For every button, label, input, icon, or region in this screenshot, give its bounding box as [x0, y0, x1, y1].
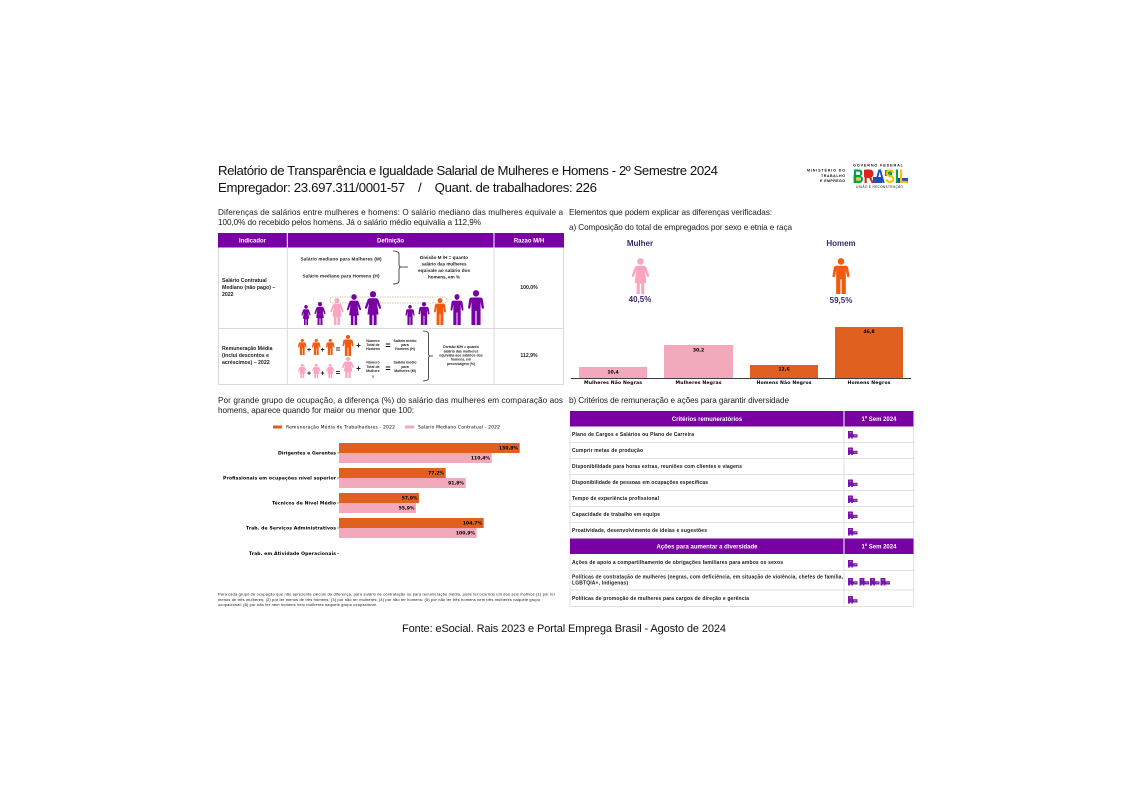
title: Empregador: 23.697.311/0001-57 / Quant. de trabalhadores: 226: [218, 180, 597, 195]
definição mediana: fórmula: homens, em %: [428, 274, 460, 280]
text: por grande grupo de ocupação: Por grande grupo de ocupação, a diferença (%) do salário das mulheres em comparação aos: [218, 396, 563, 405]
panel: mulher: [627, 239, 653, 304]
bar: homens negros: [835, 327, 903, 386]
definição média: mulheres: Mulheres (M): [394, 369, 416, 373]
footnote: ocupacional; (6) por não ter nem homens nem mulheres naquele grupo ocupacional.: [218, 602, 377, 607]
header: ações: [570, 538, 914, 554]
panel: homem: Homem: [826, 239, 856, 248]
bars: profissionais: [223, 468, 466, 488]
definição média: homens: Salário médio: [394, 339, 416, 343]
bars: técnicos: 57,9%: [402, 496, 418, 502]
bars: dirigentes e gerentes: Dirigentes e Gerentes: [278, 451, 336, 457]
panel: mulher: Mulher: [627, 239, 653, 248]
definição média: homens: +: [320, 347, 325, 354]
definição mediana: fórmula: salário das mulheres: [422, 262, 467, 266]
definição média: homens: [298, 335, 416, 356]
text: por grande grupo de ocupação: [218, 396, 563, 415]
bars: profissionais: Profissionais em ocupações nível superior: [223, 475, 337, 482]
bar: mulheres negras: [664, 345, 733, 386]
footnote: menos de três mulheres; (2) por ter menos de três homens; (3) por não ter mulheres; (4) por não ter homens; (5) por não ter três homens nem três mulheres naquele grupo: [218, 597, 540, 602]
footnote: Para cada grupo de ocupação que não apresenta cálculo da diferença, para salário de contratação ou para remuneração média, pode ter ocorrido um dos seis motivos (1) por ter: [218, 592, 556, 596]
bars: dirigentes e gerentes: 130,8%: [499, 446, 518, 452]
text: diferenças de salários: Diferenças de salários entre mulheres e homens: O salário mediano das mulheres equivale a: [218, 208, 563, 217]
definição média: homens: Homens: [366, 347, 380, 351]
table header: Indicador: [239, 238, 267, 244]
bar chart: diferença por ocupação: [223, 424, 520, 557]
definição média: mulheres: Número: [366, 360, 380, 364]
row: equipe: Capacidade de trabalho em equipe: [572, 512, 660, 518]
definição média: homens: +: [307, 347, 311, 354]
bar: mulheres negras: Mulheres Negras: [676, 380, 722, 386]
row: ocupações específicas: Disponibilidade de pessoas em ocupações específicas: [572, 480, 708, 486]
bars: profissionais: 91,8%: [448, 481, 464, 487]
label: atividade operacionais: Trab. em Atividade Operacionais: [249, 551, 336, 557]
definição média: mulheres: Salário médio: [394, 360, 416, 364]
chave e divisão M/H: salário das mulheres: [444, 349, 478, 353]
bar: homens não negros: [750, 365, 818, 386]
value: razão média: 112,9%: [520, 353, 538, 359]
row label: remuneração média: (inclui descontos e: [222, 353, 269, 359]
panel: homem: [826, 239, 856, 305]
row label: salário contratual: Mediano (não pago) –: [222, 285, 275, 291]
row: plano de cargos: Plano de Cargos e Salários ou Plano de Carreira: [572, 432, 694, 438]
definição média: homens: Total de: [366, 343, 380, 347]
text: diferenças de salários: [218, 208, 563, 227]
definição mediana: fórmula: Divisão M /H = quanto: [420, 255, 468, 260]
icon: homem: [832, 258, 850, 294]
logo: ministério e governo federal: UNIÃO E RECONSTRUÇÃO: [856, 184, 904, 189]
text: elementos: [569, 208, 792, 232]
row: experiência: Tempo de experiência profissional: [572, 496, 660, 502]
definição média: mulheres: +: [320, 370, 325, 378]
chave e divisão M/H: homens, em: [451, 358, 471, 362]
row: metas: [572, 448, 858, 455]
row label: remuneração média: Remuneração Média: [222, 346, 273, 352]
bar: homens não negros: 12,6: [778, 366, 790, 372]
panel: homem: 59,5%: [830, 296, 852, 305]
header: critérios remuneratórios: Critérios remuneratórios: [672, 417, 743, 423]
row: horas extras: Disponibilidade para horas extras, reuniões com clientes e viagens: [572, 464, 742, 470]
header: ações: 1º Sem 2024: [862, 544, 897, 550]
value: razão mediana: 100,0%: [520, 285, 538, 291]
logo: ministério e governo federal: MINISTÉRIO DO: [807, 168, 845, 172]
title: [218, 163, 718, 195]
legend: Remuneração Média de Trabalhadores - 2022: [286, 424, 395, 431]
row label: salário contratual: 2022: [222, 292, 234, 298]
icon: mulher: [632, 258, 649, 294]
definição média: homens: Número: [366, 339, 380, 343]
row: promoção: [572, 596, 858, 604]
bar: homens negros: Homens Negros: [848, 380, 891, 386]
definição média: mulheres: s: [372, 374, 374, 378]
definição média: mulheres: Total de: [366, 365, 380, 369]
bar: homens não negros: Homens Não Negros: [756, 380, 812, 386]
row label: remuneração média: [222, 346, 273, 366]
text: por grande grupo de ocupação: homens, aparece quando for maior ou menor que 100:: [218, 406, 414, 415]
panel: tabela de critérios: [570, 411, 914, 606]
legend: Salário Mediano Contratual - 2022: [418, 424, 500, 431]
bars: serviços administrativos: 104,7%: [463, 521, 482, 527]
definição média: mulheres: =: [336, 368, 341, 378]
bar: mulheres não negras: [579, 367, 647, 386]
row: experiência: [572, 496, 858, 503]
row: proatividade: [572, 528, 858, 536]
legend: [273, 424, 500, 431]
row: apoio familiar: [572, 560, 858, 568]
definição média: mulheres: [298, 357, 416, 378]
definição média: mulheres: Mulhere: [366, 369, 380, 373]
bars: técnicos: Técnicos de Nível Médio: [272, 500, 336, 507]
chave e divisão M/H: [423, 331, 483, 381]
definição média: mulheres: +: [356, 364, 361, 373]
definição média: mulheres: para: [401, 365, 409, 369]
bars: serviços administrativos: 100,9%: [456, 531, 475, 537]
header: critérios remuneratórios: 1º Sem 2024: [862, 417, 897, 423]
logo: ministério e governo federal: [807, 164, 908, 189]
source: Fonte: eSocial. Rais 2023 e Portal Emprega Brasil - Agosto de 2024: [402, 623, 726, 635]
panel: mulher: 40,5%: [629, 295, 651, 304]
table header: Definição: [377, 238, 404, 244]
bars: profissionais: 77,2%: [428, 471, 444, 477]
row label: remuneração média: acréscimos) – 2022: [222, 360, 270, 366]
logo: ministério e governo federal: GOVERNO FEDERAL: [853, 164, 904, 168]
logo: ministério e governo federal: TRABALHO: [821, 174, 845, 178]
row: plano de cargos: [572, 431, 858, 439]
row: contratação: [572, 574, 890, 586]
chave e divisão M/H: percentagem (%): [447, 362, 475, 366]
bars: serviços administrativos: [246, 518, 484, 538]
definição média: homens: para: [401, 343, 409, 347]
logo: ministério e governo federal: E EMPREGO: [820, 179, 845, 183]
text: critérios heading: b) Critérios de remuneração e ações para garantir diversidade: [569, 396, 789, 405]
text: diferenças de salários: 100,0% do recebido pelos homens. Já o salário médio equivalia a 112,9%: [218, 218, 481, 227]
row: contratação: Políticas de contratação de mulheres (negras, com deficiência, em situação de violência, chefes de família,: [572, 574, 844, 580]
definição média: homens: Homens (H): [395, 347, 415, 351]
bars: serviços administrativos: Trab. de Serviços Administrativos: [246, 526, 336, 532]
header: ações: Ações para aumentar a diversidade: [656, 544, 758, 550]
bar chart: composição: [571, 327, 911, 386]
bars: dirigentes e gerentes: 110,4%: [471, 456, 490, 462]
definição média: homens: =: [336, 345, 341, 354]
definição média: mulheres: +: [307, 370, 311, 378]
row: promoção: Políticas de promoção de mulheres para cargos de direção e gerência: [572, 596, 749, 602]
row label: salário contratual: [222, 278, 275, 298]
row label: salário contratual: Salário Contratual: [222, 278, 267, 284]
row: contratação: LGBTQIA+, Indígenas): [572, 580, 628, 586]
definição mediana: fórmula: [300, 251, 470, 284]
text: elementos: a) Composição do total de empregados por sexo e etnia e raça: [569, 223, 792, 232]
definição média: homens: +: [356, 341, 361, 350]
bar: mulheres não negras: Mulheres Não Negras: [584, 380, 642, 386]
header: critérios remuneratórios: [570, 411, 914, 426]
pictograma: mulheres e homens ordenados: [301, 290, 484, 325]
panel: tabela de indicadores: [218, 233, 564, 384]
row: ocupações específicas: [572, 480, 858, 487]
title: Relatório de Transparência e Igualdade Salarial de Mulheres e Homens - 2º Semestre 2024: [218, 163, 718, 178]
definição média: homens: =: [385, 340, 391, 350]
table header: Razao M/H: [514, 238, 544, 244]
table header: [218, 233, 564, 248]
bar: mulheres negras: 30,2: [693, 348, 704, 354]
row: equipe: [572, 512, 858, 519]
row: metas: Cumprir metas de produção: [572, 448, 643, 454]
definição média: mulheres: =: [385, 364, 391, 374]
bar: mulheres não negras: 10,4: [607, 370, 619, 376]
definição mediana: fórmula: equivale ao salário dos: [418, 268, 470, 273]
bars: dirigentes e gerentes: [278, 443, 520, 463]
bar: homens negros: 46,8: [863, 329, 875, 335]
row: proatividade: Proatividade, desenvolvimento de ideias e sugestões: [572, 528, 707, 534]
chave e divisão M/H: Divisão M/H = quanto: [443, 345, 479, 349]
definição mediana: fórmula: Salário mediano para Homens (H): [302, 274, 380, 278]
footnote: [218, 592, 556, 607]
bars: técnicos: 55,9%: [399, 506, 415, 512]
text: elementos: Elementos que podem explicar as diferenças verificadas:: [569, 208, 772, 217]
logo: ministério e governo federal: BRASIL: [853, 167, 908, 188]
definição mediana: fórmula: Salário mediano para Mulheres (M): [300, 256, 382, 262]
bars: técnicos: [272, 493, 419, 513]
row: apoio familiar: Ações de apoio a compartilhamento de obrigações familiares para ambos os sexos: [572, 560, 783, 566]
chave e divisão M/H: equivalia aos salários dos: [439, 354, 483, 358]
